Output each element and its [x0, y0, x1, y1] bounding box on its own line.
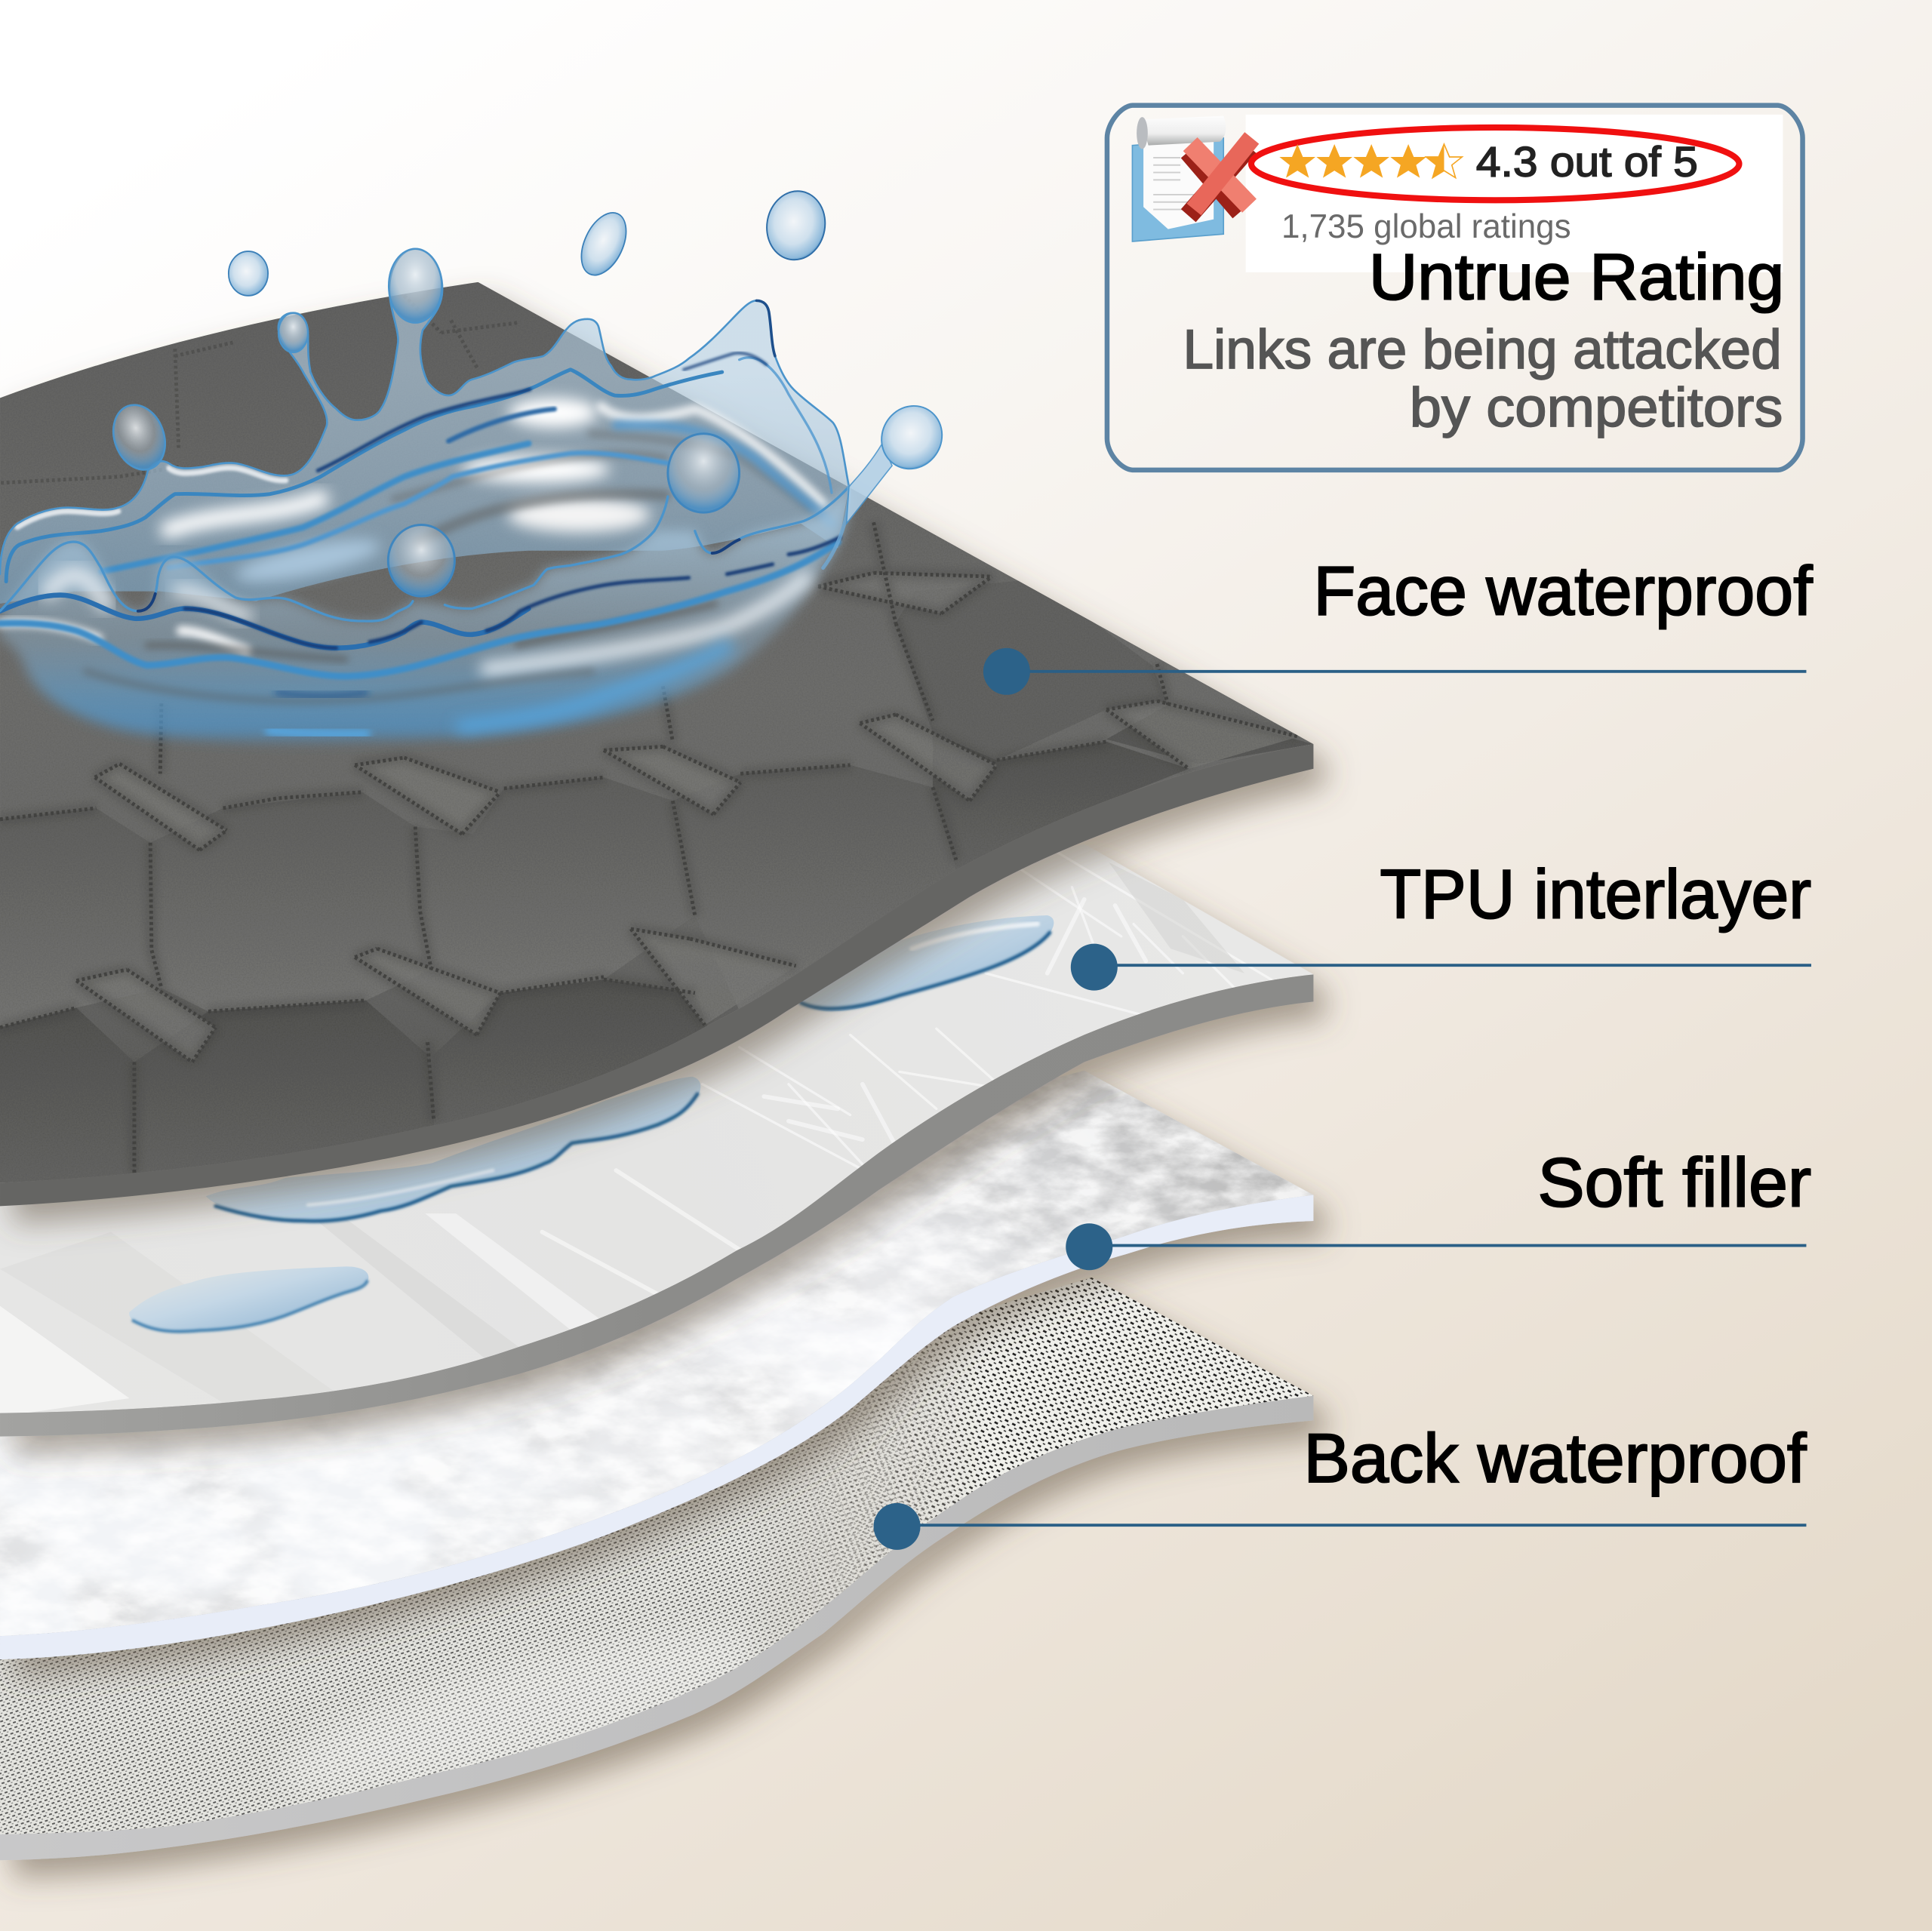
water puddle 1: [795, 915, 1054, 1011]
layer: soft filler: [0, 1047, 1355, 1663]
icon: red cross: [1189, 138, 1252, 216]
notice line 2: by competitors: [1410, 376, 1783, 438]
notice line 1: Links are being attacked: [1183, 318, 1782, 380]
splash back wall highlights: [169, 398, 832, 590]
leader line: [1094, 964, 1811, 966]
marker dot: [983, 648, 1030, 695]
layer: back waterproof: [0, 1278, 1343, 1897]
label: TPU interlayer: [1380, 856, 1811, 933]
splash flow lines back: [0, 249, 849, 582]
marker dot: [1071, 944, 1118, 991]
upper faint stitches: [0, 296, 518, 483]
hexagon cells shading: [0, 579, 1313, 1188]
soft filler fibrous surface: [0, 1047, 1355, 1663]
loose droplet middle: [572, 206, 635, 282]
loose droplet left: [229, 251, 268, 296]
leader line: [1089, 1244, 1806, 1247]
panel: untrue rating notice: [1107, 106, 1803, 470]
layer: TPU interlayer: [0, 838, 1355, 1437]
splash back wall: [0, 249, 849, 604]
rating score: 4.3 out of 5: [1476, 138, 1698, 185]
water puddle 2: [206, 1077, 700, 1221]
stitched junction bands: [76, 573, 1299, 1062]
label: Face waterproof: [1313, 553, 1813, 630]
TPU film surface with crinkles: [0, 838, 1355, 1429]
label: Back waterproof: [1303, 1420, 1807, 1497]
loose droplet right: [761, 186, 830, 264]
leader line: [1007, 671, 1806, 672]
ratings count: 1,735 global ratings: [1281, 208, 1571, 245]
quilt puff shading along seams: [0, 522, 1299, 1173]
top sheet edge: [0, 744, 1313, 1206]
label: Soft filler: [1538, 1144, 1811, 1221]
back waterproof edge: [0, 1396, 1313, 1860]
callout: TPU interlayer: [1071, 856, 1811, 991]
splash flow lines front: [0, 487, 849, 676]
water puddle 3: [129, 1266, 368, 1332]
callout: soft filler: [1066, 1144, 1811, 1270]
red ellipse highlight: [1251, 128, 1739, 200]
back waterproof dotted surface: [0, 1278, 1327, 1871]
heading: untrue rating: Untrue Rating: [1369, 241, 1784, 314]
layer: face waterproof quilted top sheet: [0, 271, 1355, 1207]
TPU edge: [0, 974, 1313, 1437]
soft filler edge: [0, 1195, 1313, 1659]
callout: back waterproof: [874, 1420, 1807, 1550]
callout: face waterproof: [983, 553, 1813, 695]
water splash crown: [0, 186, 953, 743]
zigzag stitch lines: [0, 522, 1299, 1173]
marker dot: [874, 1503, 921, 1550]
splash front wall: [0, 487, 849, 743]
panel border: [1107, 106, 1803, 470]
star rating: [1279, 144, 1462, 178]
fabric weave: [0, 271, 1355, 1207]
splash front highlights: [0, 575, 806, 734]
icon: clipboard document: [1132, 115, 1226, 241]
marker dot: [1066, 1223, 1112, 1270]
quilted surface: [0, 271, 1355, 1207]
splash attached droplets: [105, 249, 953, 596]
white ratings screenshot: [1246, 115, 1783, 272]
leader line: [897, 1524, 1806, 1526]
